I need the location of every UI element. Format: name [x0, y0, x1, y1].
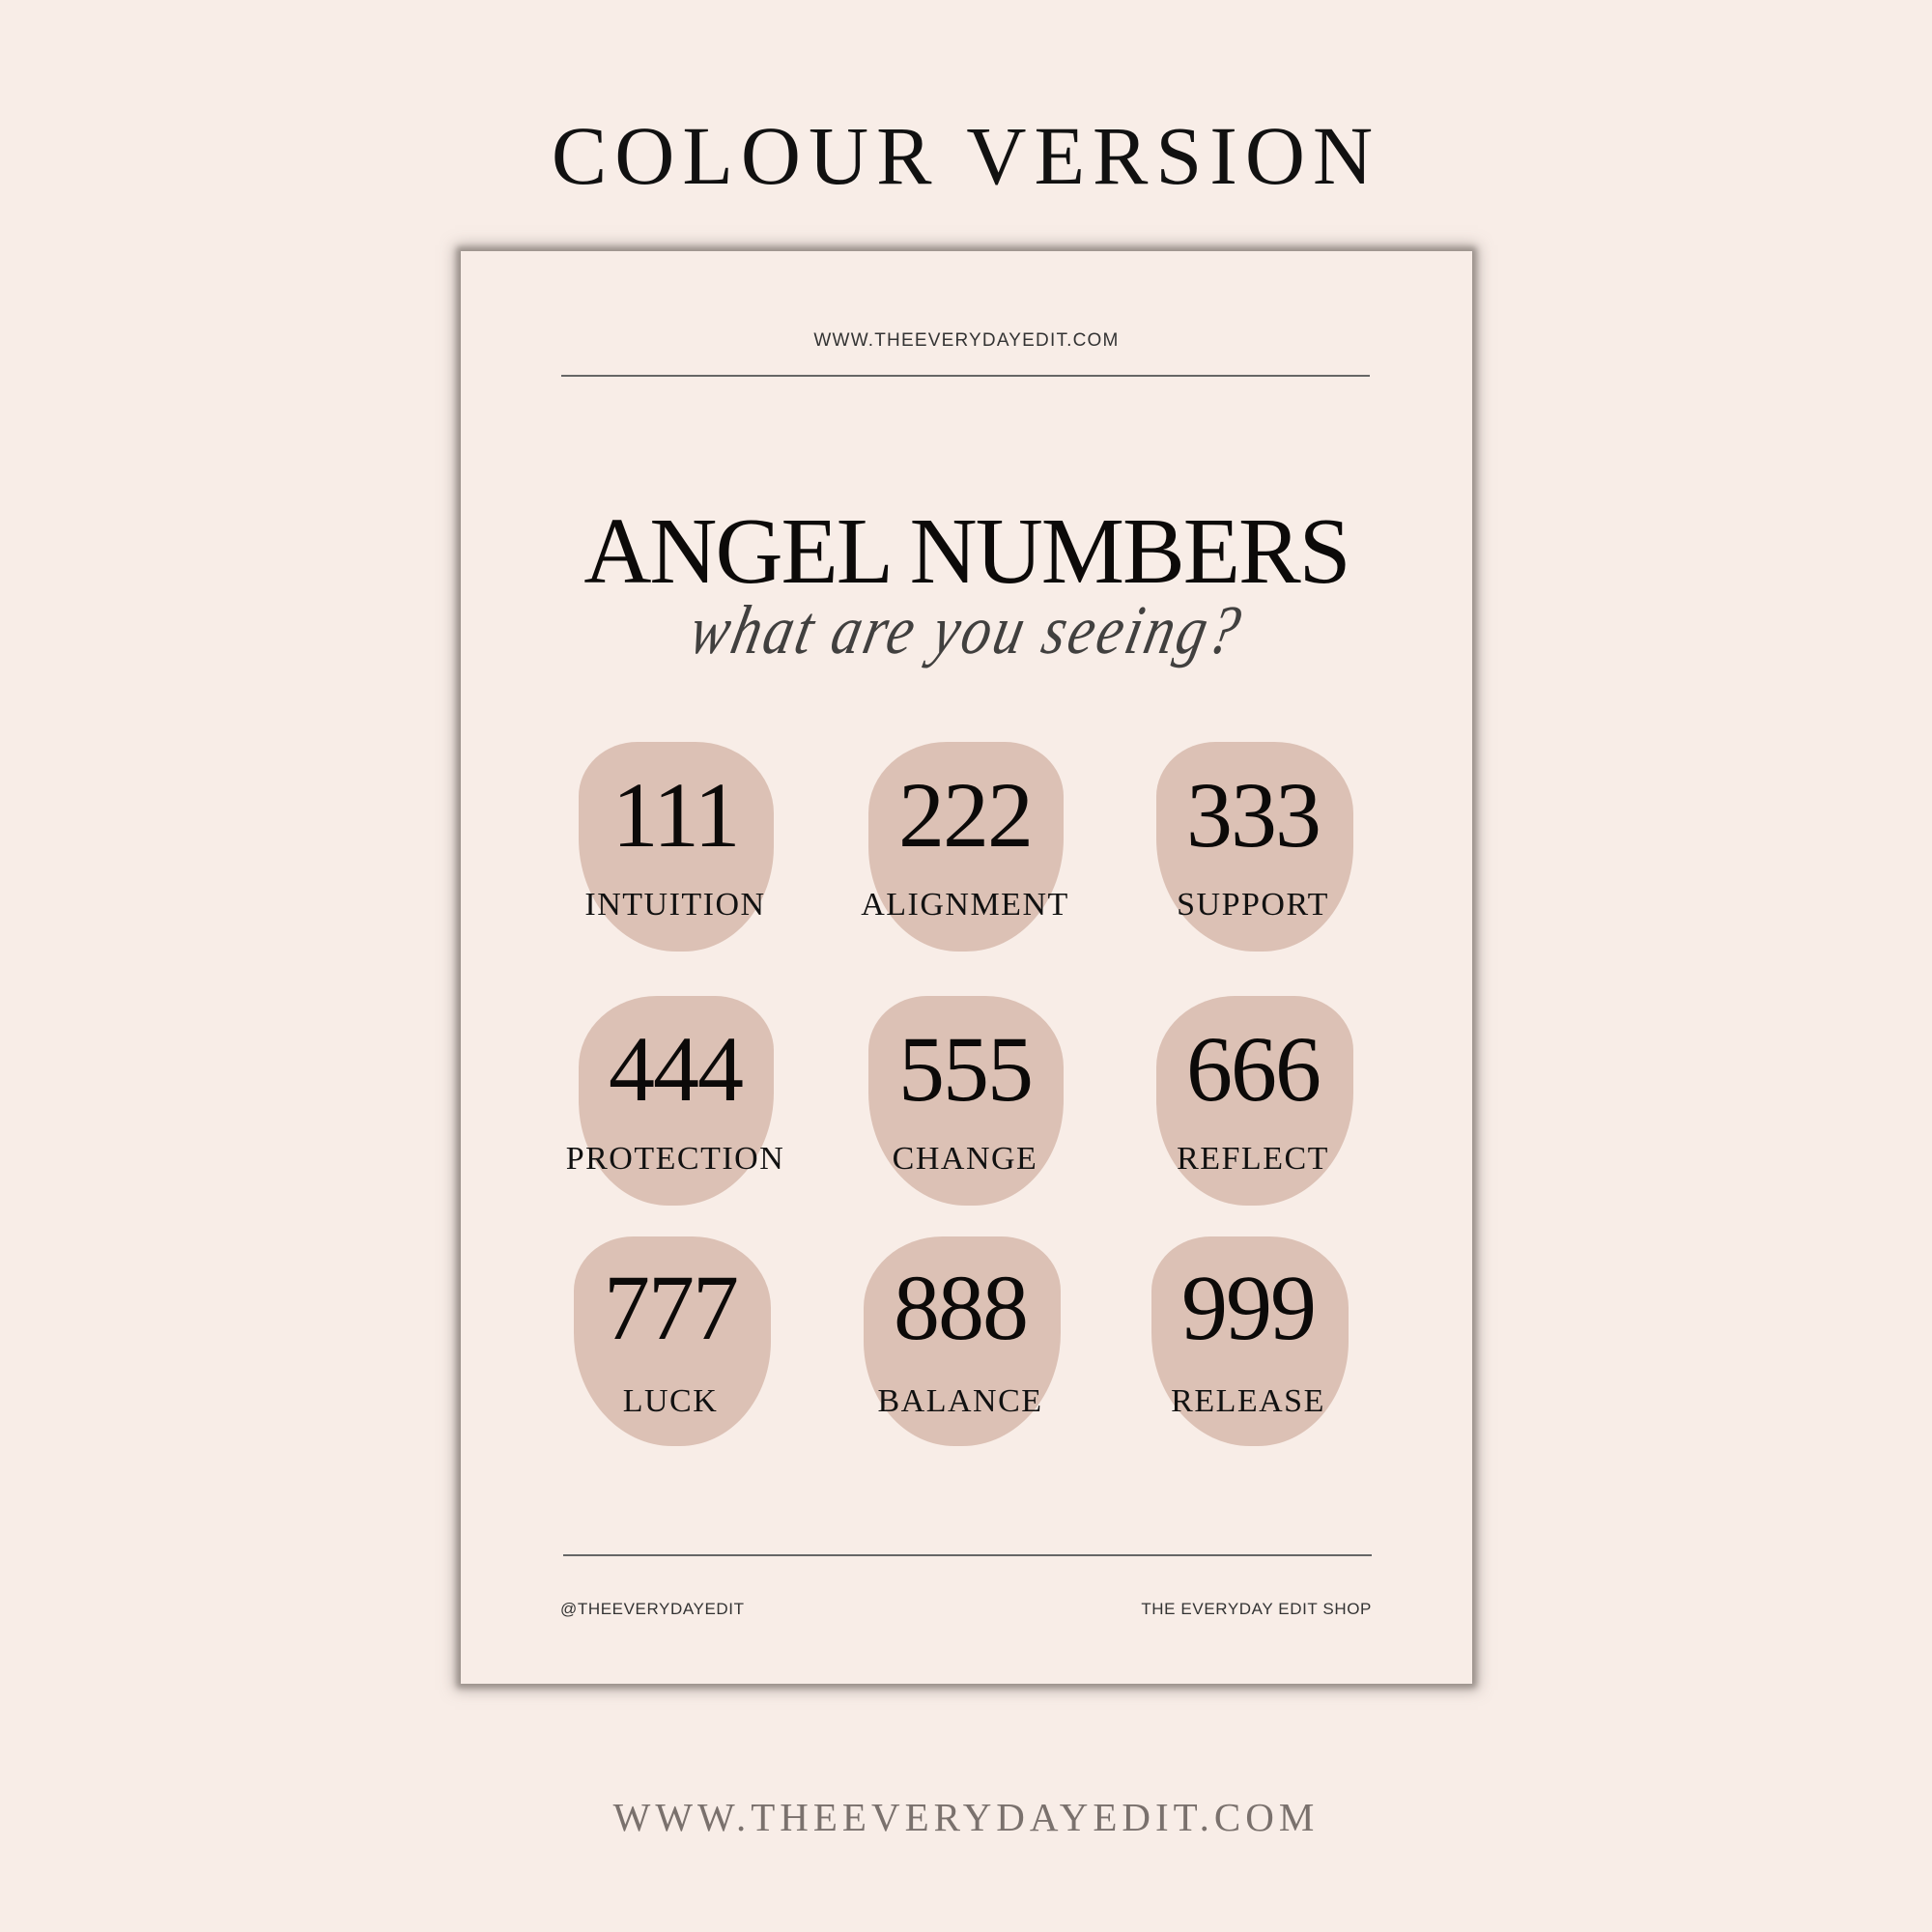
- item 333: 333: [1186, 763, 1320, 867]
- top divider: [561, 375, 1370, 377]
- bottom divider: [563, 1554, 1372, 1556]
- item 666: REFLECT: [1177, 1141, 1329, 1177]
- script subtitle: what are you seeing?: [683, 591, 1250, 668]
- item 999: [1151, 1236, 1349, 1446]
- item 444: PROTECTION: [566, 1141, 784, 1177]
- grid: numbers: [566, 742, 1353, 1446]
- item 666: 666: [1186, 1017, 1320, 1121]
- item 333: [1156, 742, 1353, 952]
- item 999: RELEASE: [1171, 1383, 1325, 1419]
- item 333: SUPPORT: [1177, 887, 1329, 923]
- item 111: INTUITION: [584, 887, 766, 923]
- item 222: [861, 742, 1069, 952]
- item 777: 777: [604, 1256, 737, 1359]
- item 888: [864, 1236, 1061, 1446]
- item 666: [1156, 996, 1353, 1206]
- item 777: [574, 1236, 771, 1446]
- item 444: [566, 996, 784, 1206]
- item 888: 888: [894, 1256, 1027, 1359]
- item 444: 444: [609, 1017, 742, 1121]
- item 111: [579, 742, 774, 952]
- card website text: WWW.THEEVERYDAYEDIT.COM: [813, 330, 1120, 351]
- item 111: 111: [612, 763, 738, 867]
- item 222: 222: [898, 763, 1032, 867]
- heading: angel numbers: ANGEL NUMBERS: [583, 499, 1350, 603]
- item 222: ALIGNMENT: [861, 887, 1069, 923]
- item 999: 999: [1181, 1256, 1315, 1359]
- item 888: BALANCE: [877, 1383, 1043, 1419]
- bottom website: WWW.THEEVERYDAYEDIT.COM: [613, 1795, 1319, 1839]
- item 777: LUCK: [623, 1383, 718, 1419]
- item 555: [868, 996, 1064, 1206]
- panel: poster card: [461, 251, 1472, 1684]
- footer left handle: @THEEVERYDAYEDIT: [560, 1600, 745, 1618]
- footer right shop: THE EVERYDAY EDIT SHOP: [1141, 1600, 1372, 1618]
- title: COLOUR VERSION: [552, 109, 1380, 202]
- item 555: CHANGE: [893, 1141, 1037, 1177]
- item 555: 555: [898, 1017, 1032, 1121]
